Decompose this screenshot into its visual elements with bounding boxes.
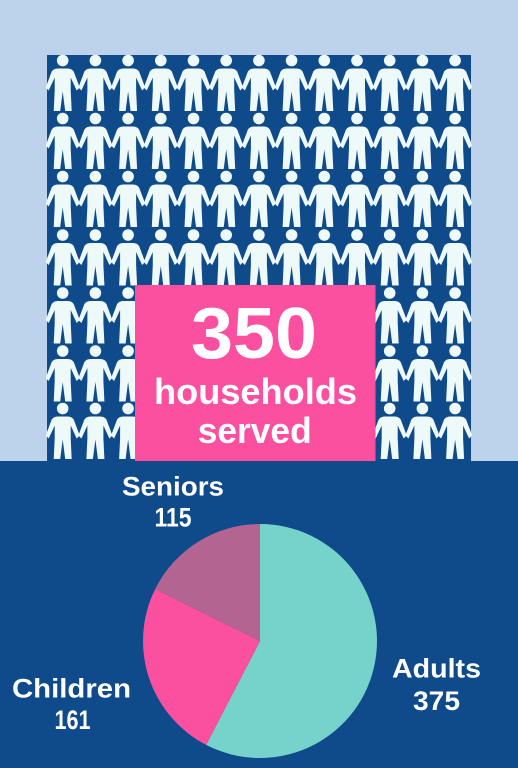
slice: adults [206, 524, 377, 758]
label: adults: 375 [413, 686, 460, 716]
panel: people pattern [46, 55, 472, 461]
label: seniors: 115 [154, 502, 192, 532]
panel: demographics [0, 461, 518, 768]
slice: seniors [155, 524, 260, 641]
label: children [12, 674, 131, 735]
label: served: served [198, 410, 312, 451]
big number: 350 [191, 294, 317, 374]
label: adults: Adults [392, 654, 481, 684]
label: children: Children [12, 674, 131, 704]
icons: rows of people [46, 55, 472, 459]
callout: 350 households served [135, 285, 376, 461]
pie chart [143, 524, 377, 758]
label: households: households [154, 371, 357, 412]
label: seniors: Seniors [122, 472, 224, 502]
label: children: 161 [54, 705, 90, 735]
slice: children [143, 589, 260, 745]
label: adults [392, 654, 481, 716]
label: seniors [122, 472, 224, 532]
